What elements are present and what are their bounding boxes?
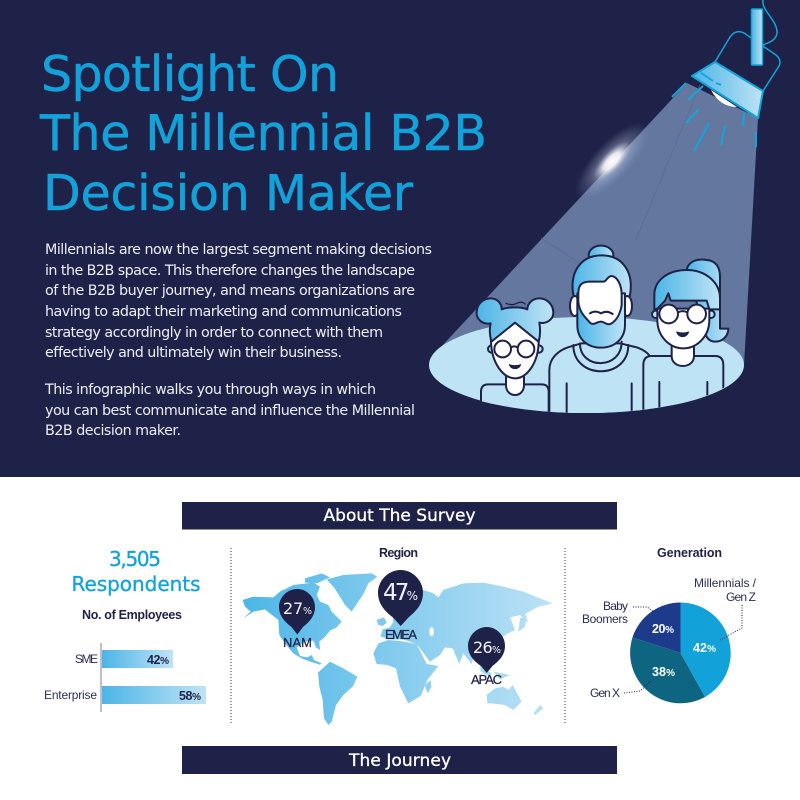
people [477,246,728,417]
title: Spotlight On [41,46,339,103]
panel: region [243,546,553,725]
pin: EMEA 47% [378,570,423,642]
heading: about the survey: About The Survey [324,506,476,526]
header background [0,0,800,477]
panel: generation [582,546,757,703]
respondents count: 3,505 [109,547,161,571]
pie labels: Boomers [582,612,628,626]
heading: about the survey [182,502,617,530]
light rays [672,83,756,151]
title: Decision Maker [43,165,414,222]
spotlight floor [429,317,744,413]
intro text [44,242,432,439]
intro text: in the B2B space. This therefore changes the landscape [45,263,415,279]
heading: the journey [182,746,617,774]
lamp mount [752,9,762,65]
pin: EMEA 47%: 47% [383,580,418,606]
lamp [672,0,780,151]
light beam [440,83,758,365]
pin: EMEA 47%: EMEA [385,627,417,642]
title: The Millennial B2B [39,105,487,162]
pie chart: 38% [652,665,675,679]
panel: respondents and employees [44,547,206,712]
intro text: effectively and ultimately win their business. [45,345,342,361]
pie chart: 20% [652,622,674,636]
pin: NAM 27% [279,589,315,650]
intro text: you can best communicate and influence the Millennial [45,403,415,419]
bar chart: employees: 42% [147,653,169,667]
cable [763,0,777,45]
pie labels: Gen Z [726,590,756,604]
pin: APAC 26% [468,627,505,687]
respondents count: Respondents [72,572,200,596]
bulb [711,90,737,107]
title [39,46,487,222]
pin: NAM 27%: 27% [283,599,312,618]
intro text: strategy accordingly in order to connect with them [45,325,383,341]
lens flare [564,111,660,211]
intro text: having to adapt their marketing and communications [45,304,402,320]
intro text: This infographic walks you through ways in which [44,382,376,398]
bar chart: employees: 58% [179,689,201,703]
pie chart [630,602,731,703]
illustration: spotlight and people [429,0,780,417]
bar chart: employees: Enterprise [44,688,97,702]
lamp head [692,62,763,118]
generation heading: Generation [657,546,722,560]
heading: the journey: The Journey [348,751,451,771]
intro text: Millennials are now the largest segment making decisions [45,242,432,258]
person: girl on left [477,298,553,417]
person: woman on right [643,260,728,417]
region heading: Region [379,546,418,560]
pie labels: Gen X [590,686,620,700]
respondents count [72,547,200,596]
person: man in centre [549,246,651,417]
pie labels: Millennials / [694,576,757,590]
pie labels [582,576,757,700]
pin: APAC 26%: 26% [473,638,501,657]
pie chart: 42% [693,641,716,655]
intro text: of the B2B buyer journey, and means organizations are [45,283,415,299]
intro text: B2B decision maker. [45,423,181,439]
lamp bracket [715,32,780,91]
pin: APAC 26%: APAC [471,672,502,687]
world map [243,573,553,725]
pie labels: Baby [603,599,628,613]
pin: NAM 27%: NAM [283,635,312,650]
pie leader lines [624,605,742,693]
employees heading: No. of Employees [82,608,182,622]
bar chart: employees [44,643,206,712]
bar chart: employees: SME [75,652,98,666]
